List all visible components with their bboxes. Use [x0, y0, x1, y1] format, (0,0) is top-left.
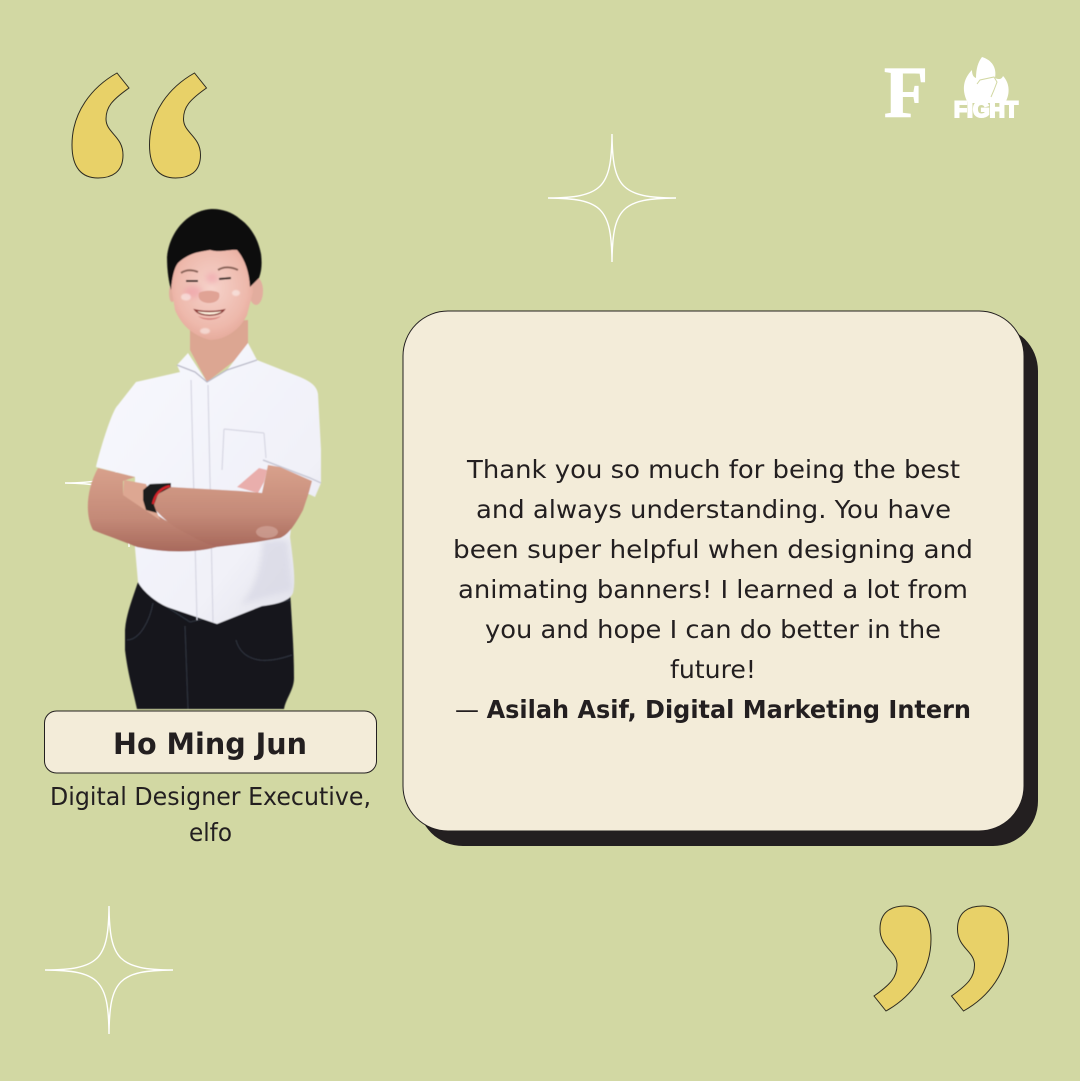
testimonial quote: and always understanding. You have: [476, 495, 951, 524]
testimonial card: [403, 311, 1038, 846]
person photo cut-out: [88, 209, 321, 709]
cheek flush: [184, 273, 218, 298]
eyes: [186, 278, 231, 281]
job title: Digital Designer Executive,: [50, 782, 371, 811]
testimonial quote: animating banners! I learned a lot from: [458, 575, 968, 604]
sparkle star top centre: [548, 134, 676, 262]
watch red accent: [153, 486, 170, 504]
closing quotation marks: [874, 906, 1008, 1011]
testimonial quote: you and hope I can do better in the: [485, 615, 941, 644]
right hand fingers: [237, 468, 267, 493]
testimonial quote: Thank you so much for being the best: [466, 455, 960, 484]
eyebrows: [181, 267, 238, 273]
face: [170, 245, 253, 340]
jeans pockets and belt: [127, 596, 292, 709]
left hand: [123, 480, 160, 520]
cheek highlights: [181, 290, 240, 334]
job title: [50, 782, 371, 847]
smile: [195, 310, 224, 315]
name plate: [44, 711, 376, 773]
job title: elfo: [189, 818, 232, 847]
shirt shading: [240, 540, 292, 605]
sparkle star bottom left: [45, 906, 173, 1034]
sleeve hem: [263, 460, 321, 483]
shirt: [96, 343, 321, 624]
logo: US Fight flame: FIGHT: [954, 97, 1019, 122]
name plate: Ho Ming Jun: [113, 727, 307, 761]
lower lip: [198, 316, 221, 320]
testimonial quote: future!: [670, 655, 756, 684]
left ear: [169, 284, 175, 302]
quote attribution: — Asilah Asif, Digital Marketing Intern: [455, 695, 971, 724]
logo: US Fight flame: [954, 57, 1019, 122]
opening quotation marks: [72, 73, 206, 178]
card body: [403, 311, 1024, 831]
neck: [190, 320, 248, 382]
right ear: [249, 277, 263, 305]
jeans: [125, 582, 294, 709]
card shadow: [418, 326, 1038, 846]
hair: [167, 209, 262, 290]
placket and pocket: [191, 380, 266, 622]
elbow highlight: [256, 526, 278, 538]
logo: F: F: [884, 52, 928, 133]
testimonial quote: been super helpful when designing and: [453, 535, 973, 564]
lower arm: [88, 468, 217, 552]
upper arm: [153, 465, 312, 547]
collar shadow: [177, 360, 257, 382]
testimonial quote: [453, 455, 973, 684]
nose: [199, 291, 219, 303]
watch: [143, 483, 171, 513]
sparkle star behind person: [65, 419, 193, 547]
